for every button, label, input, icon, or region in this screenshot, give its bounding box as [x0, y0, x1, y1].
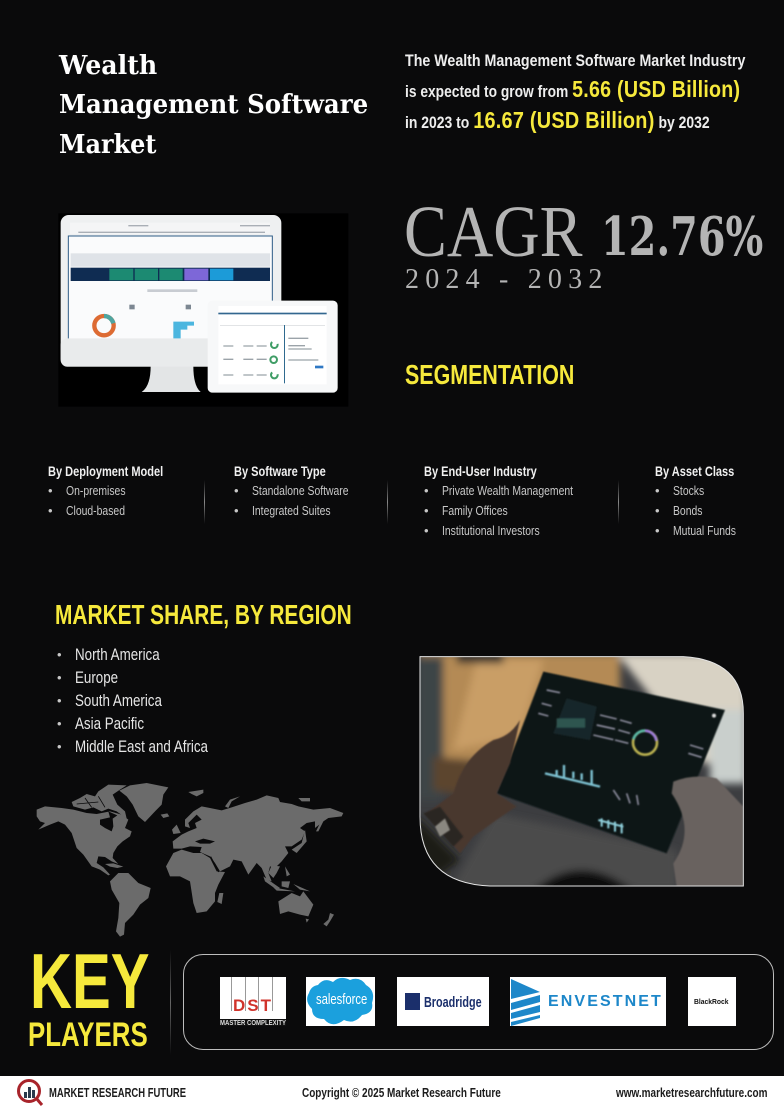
segment: asset class: Stocks: [673, 483, 704, 498]
segment: end-user industry: Institutional Investors: [442, 523, 540, 538]
logo: BlackRock: BlackRock: [694, 997, 729, 1006]
segment: software type: •: [234, 483, 239, 498]
image: hands holding tablet: [420, 656, 744, 886]
logo: DST: DST: [233, 996, 273, 1015]
segment: asset class: •: [655, 503, 660, 518]
logo: salesforce: salesforce: [316, 991, 367, 1008]
segment: deployment model: •: [48, 483, 53, 498]
region list: •: [57, 693, 62, 708]
brand name: MARKET RESEARCH FUTURE: [49, 1086, 186, 1100]
key players label: KEY: [30, 937, 149, 1025]
logo: salesforce: [306, 977, 375, 1026]
forecast years: 2024 - 2032: [405, 264, 609, 295]
logos panel: [183, 954, 774, 1050]
logo: Broadridge: [397, 977, 489, 1026]
segment: deployment model: On-premises: [66, 483, 126, 498]
segment: asset class: [655, 463, 736, 538]
logo: Envestnet: ENVESTNET: [548, 993, 663, 1010]
market size summary: [405, 52, 746, 133]
segment: asset class: Bonds: [673, 503, 702, 518]
segment: software type: Standalone Software: [252, 483, 349, 498]
region list: •: [57, 739, 62, 754]
region list: •: [57, 647, 62, 662]
title: Wealth: [59, 50, 157, 80]
segment: end-user industry: [424, 463, 573, 538]
world map: [36, 783, 344, 936]
image: monitor and tablet dashboards: [58, 214, 348, 406]
logo: Envestnet: [510, 977, 666, 1026]
region list: North America: [75, 646, 160, 664]
market share heading: MARKET SHARE, BY REGION: [55, 599, 352, 630]
icon: market research future logo: [17, 1079, 43, 1106]
segment: software type: Integrated Suites: [252, 503, 331, 518]
region list: •: [57, 670, 62, 685]
footer: [0, 1076, 784, 1108]
CAGR: CAGR: [404, 191, 582, 272]
segment: end-user industry: •: [424, 503, 429, 518]
market size summary: in 2023 to 16.67 (USD Billion) by 2032: [405, 107, 710, 133]
segment: deployment model: •: [48, 503, 53, 518]
title: Management Software: [59, 90, 368, 120]
segment: asset class: •: [655, 523, 660, 538]
segment: end-user industry: Private Wealth Management: [442, 483, 573, 498]
CAGR: 12.76%: [601, 206, 763, 268]
segmentation heading: SEGMENTATION: [405, 359, 574, 390]
market size summary: is expected to grow from 5.66 (USD Billion): [405, 76, 740, 102]
logo: DST: MASTER COMPLEXITY: [220, 1018, 286, 1027]
segment: end-user industry: Family Offices: [442, 503, 508, 518]
key players label: PLAYERS: [28, 1016, 148, 1054]
market size summary: The Wealth Management Software Market Industry: [405, 52, 745, 70]
CAGR: [404, 191, 763, 272]
region list: Asia Pacific: [75, 715, 144, 733]
segment: end-user industry: By End-User Industry: [424, 463, 537, 479]
segment: software type: •: [234, 503, 239, 518]
copyright: Copyright © 2025 Market Research Future: [302, 1085, 501, 1100]
website: www.marketresearchfuture.com: [616, 1085, 767, 1100]
region list: South America: [75, 692, 162, 710]
segment: deployment model: Cloud-based: [66, 503, 125, 518]
logo: Broadridge: Broadridge: [424, 994, 482, 1011]
logo: DST: [220, 977, 286, 1026]
region list: [57, 646, 208, 756]
title: Market: [59, 130, 156, 160]
segment: end-user industry: •: [424, 523, 429, 538]
region list: •: [57, 716, 62, 731]
segment: asset class: Mutual Funds: [673, 523, 736, 538]
segment: asset class: By Asset Class: [655, 463, 734, 479]
segment: software type: [234, 463, 349, 518]
logo: BlackRock: [688, 977, 736, 1026]
segment: software type: By Software Type: [234, 463, 326, 479]
region list: Europe: [75, 669, 118, 687]
region list: Middle East and Africa: [75, 738, 208, 756]
segment: end-user industry: •: [424, 483, 429, 498]
segment: asset class: •: [655, 483, 660, 498]
segment: deployment model: By Deployment Model: [48, 463, 163, 479]
segment: deployment model: [48, 463, 163, 518]
title: [58, 50, 368, 160]
